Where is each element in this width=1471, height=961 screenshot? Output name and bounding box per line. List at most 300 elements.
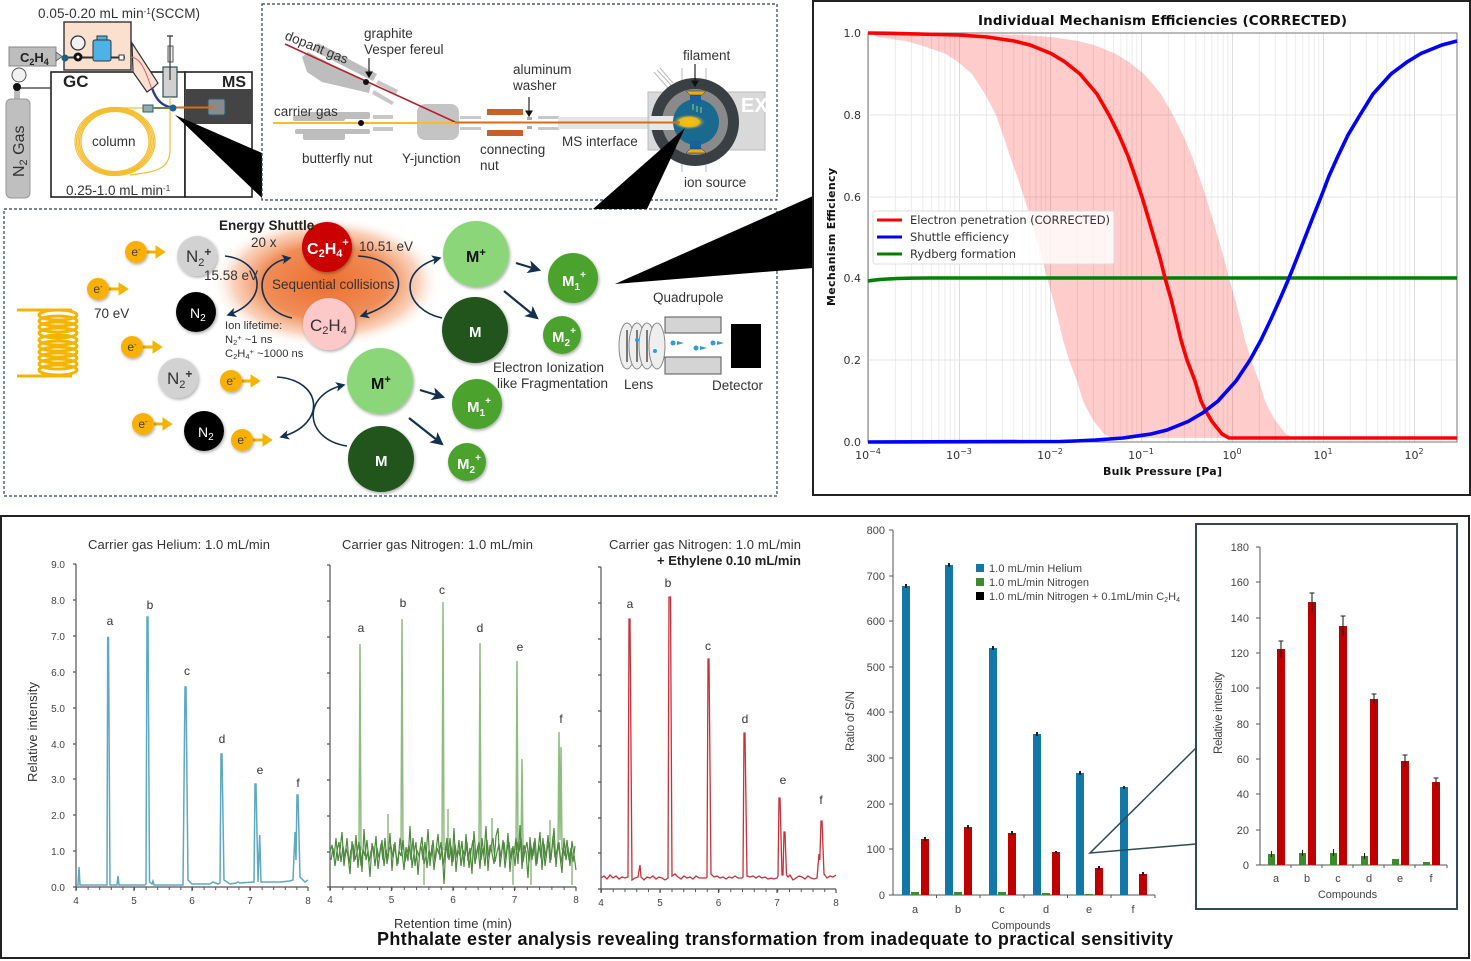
x axis labels: c: [999, 904, 1005, 916]
inset y axis labels: 40: [1237, 789, 1249, 801]
orange collision glow: [210, 216, 442, 348]
peak labels: d: [219, 732, 225, 746]
gas regulator and valve: [62, 36, 125, 62]
inset y axis labels: 60: [1237, 754, 1249, 766]
plot frame: [868, 33, 1457, 442]
reaction arrows: [225, 256, 539, 446]
chart legend: Electron penetration (CORRECTED): [910, 213, 1110, 227]
panel: ionization mechanism: [4, 209, 777, 496]
label: EI-like fragmentation: like Fragmentation: [497, 376, 608, 391]
inset y axis labels: 140: [1231, 613, 1249, 625]
y axis labels: 4.0: [51, 740, 65, 751]
x axis labels: [598, 898, 839, 909]
flow rate label: dopant: 0.05-0.20 mL min: [38, 6, 144, 21]
x axis ticks: 0: [1236, 447, 1242, 456]
peak labels: f: [559, 712, 563, 726]
M2+ upper: 2: [564, 338, 570, 349]
C2H4 cylinder: [9, 47, 62, 67]
M+ lower: +: [384, 374, 391, 386]
peak labels: [358, 583, 563, 726]
red ethylene bars: [921, 827, 1147, 895]
curve: Electron penetration: [868, 33, 1457, 438]
electron 2: -: [100, 282, 103, 291]
inset axes: [1256, 547, 1447, 868]
connecting nut: [487, 109, 523, 136]
bar chart legend: 4: [1176, 597, 1180, 604]
y axis labels: 3.0: [51, 775, 65, 786]
panel caption: Phthalate ester analysis revealing transformation from inadequate to practical sensitivity: [377, 929, 1173, 949]
peak labels: a: [107, 614, 114, 628]
inset x labels: e: [1397, 873, 1403, 885]
M1+ upper: M: [562, 273, 574, 290]
electron 1: e: [131, 245, 138, 259]
injector port: [163, 36, 177, 97]
M1+ lower: +: [485, 396, 491, 407]
x axis labels: e: [1086, 904, 1092, 916]
electron 3: -: [134, 340, 137, 349]
x axis title: Bulk Pressure [Pa]: [1103, 465, 1222, 478]
y axis labels: 0.0: [51, 883, 65, 894]
zoom wedge to injector detail: [175, 115, 262, 198]
inset error bars: [1272, 593, 1438, 859]
C2H4: H: [328, 316, 341, 335]
y axis labels: 2.0: [51, 811, 65, 822]
inset x axis title: Compounds: [1318, 889, 1378, 901]
inset y axis labels: 80: [1237, 719, 1249, 731]
ion lifetime note: 4: [245, 352, 250, 361]
M2+ upper: +: [570, 326, 576, 337]
label: Quadrupole: Quadrupole: [653, 290, 724, 305]
label: 15.58 eV: 15.58 eV: [204, 268, 258, 283]
quadrupole mass analyser: [619, 317, 761, 374]
M2+ lower: [448, 443, 486, 481]
filament coil: [17, 310, 77, 376]
peak labels: e: [257, 763, 264, 777]
inset y axis title: Relative intensity: [1213, 672, 1225, 754]
C2H4+: C: [307, 241, 319, 258]
M lower: [348, 426, 414, 492]
ion lifetime note: +: [250, 347, 255, 356]
x axis ticks: 10: [1222, 449, 1236, 462]
y axis labels: 800: [867, 525, 885, 537]
butterfly nut: carrier: [293, 112, 393, 140]
label: aluminum washer: washer: [512, 78, 557, 93]
C2H4 cylinder: 2: [29, 57, 34, 67]
M2+ upper: M: [552, 329, 564, 346]
C2H4: 4: [341, 325, 347, 337]
x axis labels: f: [1131, 904, 1135, 916]
label: connecting nut: connecting: [480, 142, 545, 157]
green nitrogen bars: [911, 892, 1093, 895]
chart legend: Shuttle efficiency: [910, 230, 1009, 244]
electron 3: [121, 336, 160, 358]
label: aluminum washer: aluminum: [513, 62, 572, 77]
panel: injection interface detail: [262, 4, 777, 200]
peak labels: c: [439, 583, 445, 597]
callout lines to inset: [1090, 748, 1196, 853]
x axis labels: 6: [189, 896, 195, 907]
label: carrier gas: carrier gas: [274, 104, 338, 119]
M1+ lower: M: [467, 399, 480, 416]
label: Lens: Lens: [624, 377, 654, 392]
bar chart: signal to noise: [845, 525, 1180, 932]
transfer lines: [131, 57, 213, 112]
M+ upper: [443, 221, 509, 287]
x axis labels: 7: [512, 895, 518, 906]
chart subtitle: + Ethylene 0.10 mL/min: [657, 553, 801, 568]
M+ upper: +: [479, 247, 486, 259]
MS block: EX: [741, 95, 768, 117]
electron 5: [132, 413, 170, 435]
x axis labels: [73, 896, 311, 907]
peak labels: b: [147, 598, 154, 612]
y axis labels: 700: [867, 571, 885, 583]
y axis labels: 5.0: [51, 704, 65, 715]
inset y axis labels: 120: [1231, 648, 1249, 660]
N2+ upper: [177, 236, 217, 276]
x axis labels: 5: [389, 895, 395, 906]
inset y axis labels: 160: [1231, 577, 1249, 589]
N2 upper: N: [190, 305, 200, 321]
peak labels: b: [400, 596, 407, 610]
y axis labels: 400: [867, 707, 885, 719]
N2+ lower: 2: [179, 379, 185, 391]
N2 lower: N: [198, 424, 208, 440]
bar chart legend: 1.0 mL/min Helium: [989, 563, 1082, 575]
y axis ticks: 0.6: [844, 191, 861, 204]
label: Y-junction: Y-junction: [402, 151, 461, 166]
bar chart legend: 2: [1164, 597, 1168, 604]
C2H4+: 2: [319, 248, 325, 260]
x axis ticks: −2: [1051, 447, 1063, 456]
ion lifetime note: 2: [233, 352, 237, 361]
x axis ticks: −1: [1142, 447, 1154, 456]
electron 6: e: [237, 433, 244, 447]
y axis title: Relative intensity: [25, 682, 40, 782]
x axis title: Compounds: [991, 920, 1051, 932]
ion lifetime note: +: [237, 333, 242, 342]
electron 4: -: [233, 374, 236, 383]
y axis ticks: [844, 27, 861, 449]
dopant capillary: [285, 44, 455, 122]
peak labels: c: [184, 664, 190, 678]
electron 4: e: [226, 374, 233, 388]
x axis labels: 5: [657, 898, 663, 909]
x axis labels: 6: [716, 898, 722, 909]
y axis labels: 100: [867, 844, 885, 856]
panel: mechanism efficiency chart: [813, 1, 1470, 495]
x axis ticks: 1: [1327, 447, 1333, 456]
ion lifetime note: C: [225, 348, 233, 360]
electron 5: -: [145, 417, 148, 426]
M+ lower: [347, 348, 413, 414]
x axis ticks: 10: [855, 449, 869, 462]
x axis labels: 8: [573, 895, 579, 906]
MS box: [185, 72, 252, 197]
label: 20 x: 20 x: [251, 235, 277, 250]
chart title: Carrier gas Nitrogen: 1.0 mL/min: [609, 537, 801, 552]
peak labels: b: [665, 576, 672, 590]
M1+ upper: [548, 253, 598, 303]
combined capillary: [455, 122, 680, 124]
C2H4+: H: [325, 241, 336, 258]
C2H4 cylinder: H: [34, 50, 44, 65]
x axis labels: 4: [327, 895, 333, 906]
y axis labels: 6.0: [51, 668, 65, 679]
inset y axis labels: 100: [1231, 683, 1249, 695]
label: MS interface: MS interface: [562, 134, 638, 149]
chart legend: [873, 211, 1114, 264]
chromatogram: nitrogen plus ethylene: [598, 537, 839, 909]
N2 gas cylinder: N: [11, 165, 28, 177]
inset x labels: a: [1273, 873, 1280, 885]
label: EI-like fragmentation: Electron Ionization: [493, 360, 604, 375]
x axis labels: 4: [598, 898, 604, 909]
y axis labels: 500: [867, 662, 885, 674]
label: graphite Vesper ferrule: graphite: [364, 26, 413, 41]
panel: phthalate ester analysis: [1, 516, 1469, 958]
error bars: [906, 563, 1143, 876]
ion source: [650, 68, 739, 172]
ion lifetime note: H: [237, 348, 245, 360]
electron 4: [220, 370, 258, 392]
y axis ticks: 0.0: [844, 436, 861, 449]
label: butterfly nut: butterfly nut: [302, 151, 373, 166]
y axis labels: 600: [867, 616, 885, 628]
bar chart legend: 1.0 mL/min Nitrogen: [989, 577, 1089, 589]
peak labels: e: [517, 640, 524, 654]
x axis ticks: −4: [869, 447, 881, 456]
N2+ lower: [158, 358, 198, 398]
C2H4: [303, 298, 355, 350]
peak labels: a: [358, 621, 365, 635]
x axis labels: [912, 904, 1135, 916]
bar chart legend: [976, 563, 1180, 604]
x axis ticks: 10: [946, 449, 960, 462]
x axis labels: 4: [73, 896, 79, 907]
peak labels: [107, 598, 300, 790]
x axis labels: a: [912, 904, 919, 916]
trace: [76, 617, 308, 885]
x axis labels: 7: [774, 898, 780, 909]
y axis labels: 300: [867, 753, 885, 765]
aluminum washer: [527, 117, 532, 129]
y axis ticks: 1.0: [844, 27, 861, 40]
bar chart legend: H: [1168, 591, 1176, 603]
axes: [73, 564, 308, 891]
MS label: MS: [222, 74, 246, 91]
panel: GC-MS instrument schematic: [6, 6, 252, 198]
N2 gas cylinder: Gas: [11, 126, 28, 159]
noise baseline: [330, 825, 576, 884]
ion lifetime note: Ion lifetime:: [225, 320, 282, 332]
heading: Energy Shuttle: Energy Shuttle: [219, 218, 315, 233]
C2H4 cylinder: C: [20, 50, 29, 65]
ion lifetime note: 2: [233, 338, 237, 347]
N2+ upper: +: [204, 245, 211, 259]
label: Detector: Detector: [712, 378, 764, 393]
y axis labels: 0: [879, 890, 885, 902]
x axis ticks: 10: [1128, 449, 1142, 462]
Y-junction: [417, 104, 459, 140]
N2 upper: 2: [200, 313, 206, 324]
M1+ upper: 1: [574, 282, 580, 293]
M2+ lower: 2: [470, 465, 476, 476]
M+ lower: M: [371, 376, 384, 393]
inset y axis labels: 20: [1237, 825, 1249, 837]
peak labels: f: [819, 793, 823, 807]
x axis labels: d: [1043, 904, 1049, 916]
electron 2: [87, 278, 126, 300]
ferrules: [358, 79, 369, 126]
plot grid: [868, 33, 1457, 442]
inset y axis labels: 0: [1243, 860, 1249, 872]
label: connecting nut: nut: [480, 158, 499, 173]
electron 6: -: [244, 433, 247, 442]
inset y axis labels: [1231, 542, 1249, 872]
y axis ticks: 0.2: [844, 354, 861, 367]
label: 10.51 eV: 10.51 eV: [359, 239, 413, 254]
y axis labels: 8.0: [51, 596, 65, 607]
ion lifetime note: ~1000 ns: [254, 348, 304, 360]
y axis ticks: 0.8: [844, 109, 861, 122]
chart title: Carrier gas Helium: 1.0 mL/min: [88, 537, 270, 552]
M2+ upper: [543, 316, 581, 354]
y axis ticks: 0.4: [844, 272, 861, 285]
trace: [601, 597, 836, 880]
x axis ticks: 10: [1404, 449, 1418, 462]
uncertainty band: [868, 33, 1293, 438]
x axis labels: 7: [247, 896, 253, 907]
x axis ticks: [855, 447, 1424, 462]
x axis ticks: 10: [1313, 449, 1327, 462]
y axis title: Ratio of S/N: [845, 691, 857, 751]
axes: [598, 567, 836, 893]
M lower: M: [375, 453, 388, 470]
flow rate label: dopant: -1: [144, 7, 151, 16]
label: ion source: ion source: [684, 175, 746, 190]
y axis labels: 7.0: [51, 632, 65, 643]
chart title: Individual Mechanism Efficiencies (CORRECTED): [978, 13, 1347, 29]
axes: [327, 565, 576, 891]
chart legend: Rydberg formation: [910, 247, 1016, 261]
x axis labels: [327, 895, 579, 906]
label: dopant gas: dopant gas: [283, 28, 351, 67]
N2 lower: 2: [208, 432, 214, 443]
electron 2: e: [93, 282, 100, 296]
inset x labels: [1273, 873, 1433, 885]
inset y axis labels: 180: [1231, 542, 1249, 554]
electron 5: e: [138, 417, 145, 431]
M1+ lower: [452, 379, 502, 429]
C2H4: C: [310, 316, 322, 335]
capillary column coil: [75, 97, 170, 176]
C2H4: 2: [322, 325, 328, 337]
column flow rate: 0.25-1.0 mL min: [66, 183, 163, 198]
chromatogram: nitrogen carrier: [327, 537, 579, 931]
N2+ lower: N: [167, 369, 179, 388]
electron 3: e: [127, 340, 134, 354]
label: 70 eV: 70 eV: [94, 306, 129, 321]
M2+ lower: M: [457, 456, 470, 473]
N2+ upper: 2: [198, 257, 204, 269]
inset x labels: d: [1366, 873, 1372, 885]
GC oven box: [51, 72, 185, 197]
N2+ upper: N: [186, 247, 198, 266]
ion lifetime note: ~1 ns: [242, 334, 273, 346]
pointer arrows: [366, 58, 698, 116]
peak labels: e: [780, 773, 787, 787]
bar chart legend: 1.0 mL/min Nitrogen + 0.1mL/min C: [989, 591, 1164, 603]
N2 lower: [184, 411, 224, 451]
M1+ lower: 1: [480, 408, 486, 419]
dopant gas box: [64, 22, 131, 70]
peak labels: [627, 576, 823, 807]
C2H4+: +: [342, 237, 349, 249]
threads: [460, 116, 559, 130]
peak labels: a: [627, 597, 634, 611]
inset red bars: [1277, 602, 1440, 865]
M upper: M: [469, 324, 482, 341]
y axis labels: [51, 560, 65, 894]
M+ upper: M: [466, 249, 479, 266]
x axis ticks: 10: [1037, 449, 1051, 462]
label: Sequential collisions: Sequential collisions: [272, 277, 395, 292]
y axis title: Mechanism Efficiency: [825, 168, 838, 306]
y axis labels: [867, 525, 885, 902]
column flow rate: -1: [163, 184, 171, 193]
x axis labels: 6: [450, 895, 456, 906]
C2H4+: 4: [336, 248, 343, 260]
transfer housing: [132, 43, 158, 92]
carrier capillary: [273, 122, 455, 124]
butterfly nut: dopant: [302, 43, 398, 105]
M upper: [442, 297, 508, 363]
N2+ lower: +: [185, 367, 192, 381]
x axis labels: 8: [305, 896, 311, 907]
x axis title: Retention time (min): [394, 916, 512, 931]
x axis labels: 5: [131, 896, 137, 907]
column label: column: [92, 134, 136, 149]
inset x labels: b: [1304, 873, 1310, 885]
curve: Rydberg formation: [868, 278, 1457, 281]
y axis labels: 9.0: [51, 560, 65, 571]
N2 gas cylinder: [6, 68, 51, 198]
C2H4+: [302, 222, 352, 272]
peak labels: d: [477, 621, 483, 635]
inset green bars: [1268, 853, 1430, 865]
y axis labels: 200: [867, 799, 885, 811]
zoom wedge to efficiency chart: [615, 196, 813, 284]
MS interface tube: [558, 117, 648, 129]
electron 6: [231, 429, 270, 451]
inset bar chart: [1196, 524, 1457, 909]
x axis labels: b: [955, 904, 961, 916]
electron 1: -: [138, 245, 141, 254]
x axis ticks: −3: [960, 447, 972, 456]
chromatogram: helium carrier: [25, 537, 311, 907]
GC label: GC: [63, 72, 88, 91]
inset x labels: c: [1335, 873, 1341, 885]
M2+ lower: +: [475, 453, 481, 464]
C2H4 cylinder: 4: [44, 57, 49, 67]
inset x labels: f: [1429, 873, 1433, 885]
chart title: Carrier gas Nitrogen: 1.0 mL/min: [342, 537, 533, 552]
label: graphite Vesper ferrule: Vesper fereul: [364, 42, 444, 57]
electron 1: [125, 241, 163, 263]
MS block: [648, 92, 768, 150]
peak labels: c: [705, 639, 711, 653]
